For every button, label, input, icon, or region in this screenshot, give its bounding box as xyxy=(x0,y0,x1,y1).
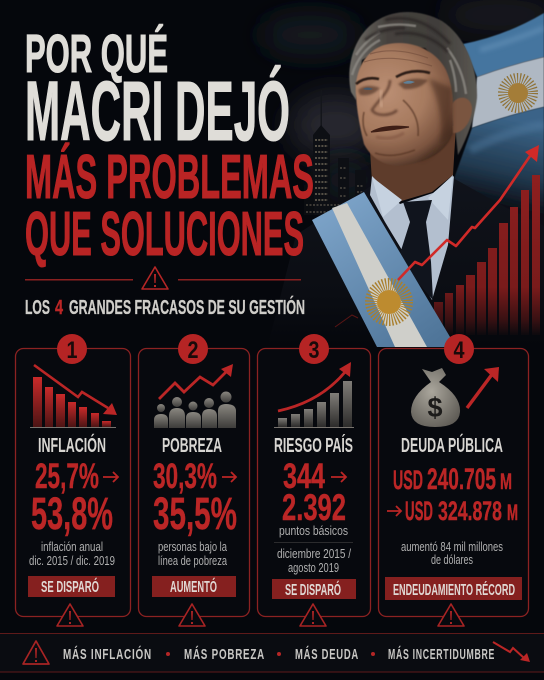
number badge 2: 2 xyxy=(188,337,198,364)
rising red arrow xyxy=(335,145,539,327)
panel: riesgo país: diciembre 2015 / xyxy=(277,547,351,561)
portrait illustration xyxy=(268,12,544,347)
footer band: MÁS INFLACIÓN xyxy=(63,645,152,663)
number badge 1 xyxy=(57,334,87,364)
panel: pobreza: 35,5% xyxy=(153,488,237,539)
footer band: MÁS DEUDA xyxy=(295,646,359,663)
subtitle: LOS xyxy=(25,297,50,319)
panel: riesgo país: SE DISPARÓ xyxy=(285,580,341,599)
icon: people and rising line xyxy=(154,364,236,428)
panel: deuda pública xyxy=(378,334,528,626)
icon: warning triangle xyxy=(438,604,464,626)
icon: falling bar chart xyxy=(30,365,117,428)
tie xyxy=(398,200,433,300)
panel: pobreza: POBREZA xyxy=(162,435,222,457)
icon: warning triangle xyxy=(179,604,205,626)
panel: deuda pública: de dólares xyxy=(431,553,473,567)
panel: riesgo país: puntos básicos xyxy=(279,524,348,538)
panel: riesgo país: 344 xyxy=(283,457,325,496)
title: MACRI DEJÓ xyxy=(25,64,290,158)
icon: money bag and arrow xyxy=(411,367,499,427)
number badge 4 xyxy=(444,334,474,364)
number badge 1: 1 xyxy=(66,337,78,364)
panel: pobreza xyxy=(138,334,250,626)
debt figures: M xyxy=(507,500,518,525)
panel: inflación: 25,7% xyxy=(35,457,99,496)
footer band: MÁS POBREZA xyxy=(184,646,265,663)
panel: riesgo país: 2.392 xyxy=(282,487,346,528)
subtitle xyxy=(25,295,305,319)
icon: money bag and arrow: $ xyxy=(428,392,443,423)
icon: falling arrow xyxy=(493,642,530,662)
chart bars xyxy=(434,175,540,335)
debt figures: USD xyxy=(393,465,423,495)
panel: inflación: INFLACIÓN xyxy=(38,433,106,457)
shirt xyxy=(370,176,454,300)
title: POR QUÉ xyxy=(25,24,168,84)
sun on sash xyxy=(371,284,407,320)
panel: pobreza: línea de pobreza xyxy=(158,554,227,568)
panel: inflación: SE DISPARÓ xyxy=(41,577,99,596)
panel: pobreza: 30,3% xyxy=(153,457,217,496)
subtitle: GRANDES FRACASOS DE SU GESTIÓN xyxy=(69,295,305,319)
sun on flag xyxy=(504,79,532,107)
arrow xyxy=(103,472,118,482)
hair xyxy=(349,12,477,155)
skyline xyxy=(304,90,366,215)
subtitle: 4 xyxy=(55,297,64,319)
number badge 3: 3 xyxy=(308,337,320,364)
debt figures xyxy=(387,463,518,526)
icon: warning triangle xyxy=(23,641,49,664)
flag xyxy=(450,13,544,230)
debt figures: 240.705 xyxy=(427,463,496,496)
panel: pobreza: personas bajo la xyxy=(158,540,227,554)
suit xyxy=(268,178,544,345)
arrow xyxy=(331,472,346,482)
arrow xyxy=(222,472,236,482)
footer band xyxy=(0,633,544,672)
panel: inflación: dic. 2015 / dic. 2019 xyxy=(29,554,115,568)
sash xyxy=(312,192,456,347)
panel: inflación: 53,8% xyxy=(31,488,113,539)
debt figures: M xyxy=(500,469,512,494)
debt figures: USD xyxy=(405,496,433,526)
number badge 4: 4 xyxy=(454,337,465,364)
panel: inflación xyxy=(16,334,130,626)
debt figures: 324.878 xyxy=(438,496,502,526)
icon: rising bars and curve xyxy=(274,362,354,428)
panel: riesgo país xyxy=(258,334,370,626)
title xyxy=(25,24,314,269)
divider with warning icon xyxy=(25,267,301,289)
icon: warning triangle xyxy=(300,604,326,626)
panel: pobreza: AUMENTÓ xyxy=(170,577,217,596)
panel: inflación: inflación anual xyxy=(41,540,103,554)
icon: warning triangle xyxy=(57,604,83,626)
panel: riesgo país: RIESGO PAÍS xyxy=(274,434,353,457)
number badge 3 xyxy=(299,334,329,364)
panel: deuda pública: aumentó 84 mil millones xyxy=(401,540,503,554)
face xyxy=(356,43,453,166)
facial features xyxy=(356,51,452,162)
neck xyxy=(370,125,456,202)
panel: riesgo país: agosto 2019 xyxy=(288,561,339,575)
ear xyxy=(452,98,472,133)
number badge 2 xyxy=(178,334,208,364)
